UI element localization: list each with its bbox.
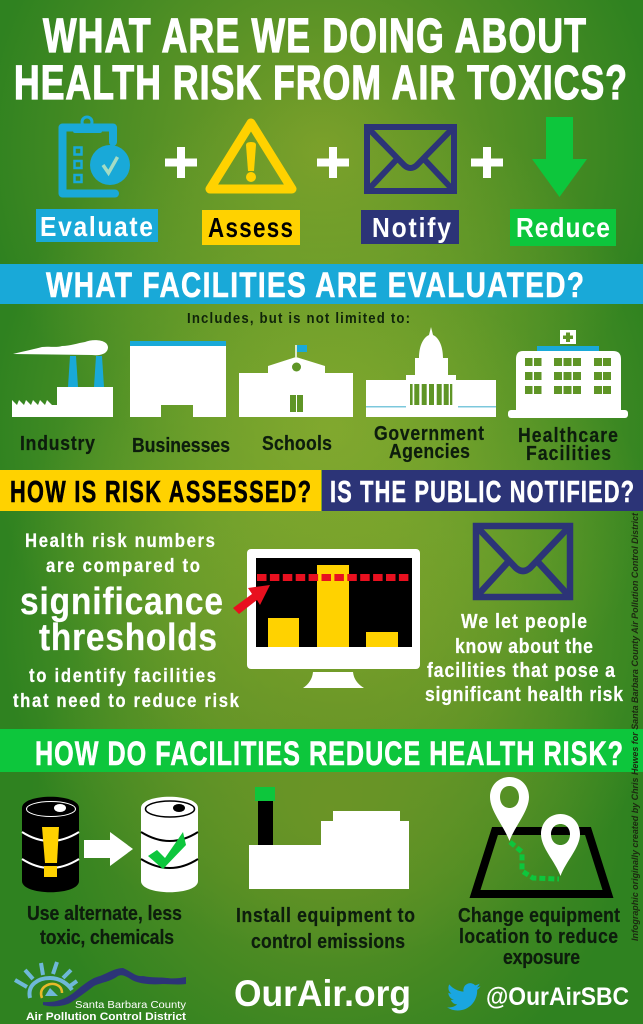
plus <box>165 147 197 178</box>
text: use alternate: toxic, chemicals <box>40 926 174 948</box>
text: we let people know: know about the <box>455 635 593 657</box>
text: install equipment: control emissions <box>251 930 405 952</box>
icon: twitter bird <box>447 983 481 1010</box>
icon: white barrel <box>141 797 198 892</box>
text: change equipment: location to reduce <box>459 925 618 947</box>
icon: businesses <box>130 341 226 417</box>
icon: government <box>366 327 496 417</box>
facility labels: Schools <box>262 432 332 454</box>
text: we let people know: We let people <box>461 610 587 632</box>
facility labels: Agencies <box>389 440 470 462</box>
title: HEALTH RISK FROM AIR TOXICS? <box>14 56 627 109</box>
icon: clipboard evaluate <box>62 117 130 194</box>
text: we let people know: significant health risk <box>425 683 623 705</box>
text: includes: Includes, but is not limited to: <box>187 309 410 326</box>
icon: black barrel <box>22 797 79 892</box>
icon: envelope notify <box>367 127 454 191</box>
icon: warning triangle assess <box>210 123 292 189</box>
heading band: is the public notified: IS THE PUBLIC NOTIFIED? <box>330 474 634 509</box>
logo: air pollution control district: Air Pollution Control District <box>26 1011 186 1023</box>
text: significance thresholds <box>13 530 239 711</box>
logo: air pollution control district: Santa Barbara County <box>75 1000 186 1011</box>
text: change equipment <box>458 904 621 968</box>
heading band: how do facilities reduce health risk: HOW DO FACILITIES REDUCE HEALTH RISK? <box>35 735 623 773</box>
facility labels: Businesses <box>132 434 230 456</box>
icon: monitor with bar chart <box>233 549 420 688</box>
text: significance thresholds: thresholds <box>39 616 217 658</box>
arrow <box>84 832 133 866</box>
text: install equipment <box>236 904 415 952</box>
heading band: what facilities are evaluated: WHAT FACILITIES ARE EVALUATED? <box>46 265 584 305</box>
text: change equipment: exposure <box>503 946 580 968</box>
facility labels <box>20 422 618 464</box>
facility labels: Healthcare <box>518 424 618 446</box>
icon: down arrow reduce <box>532 117 587 197</box>
icon: schools <box>239 345 353 417</box>
title: WHAT ARE WE DOING ABOUT <box>43 9 586 62</box>
text: significance thresholds: significance <box>20 580 223 622</box>
facility labels: Facilities <box>526 442 611 464</box>
icon: map with pins <box>475 777 608 894</box>
facility labels: Industry <box>20 432 95 454</box>
text: significance thresholds: are compared to <box>46 555 200 576</box>
icon: healthcare <box>508 330 628 418</box>
text: change equipment: Change equipment <box>458 904 621 926</box>
text: significance thresholds: to identify facilities <box>29 665 216 686</box>
icon: envelope <box>476 526 570 597</box>
label: assess: Assess <box>208 213 293 244</box>
label: notify: Notify <box>372 212 451 243</box>
website: OurAir.org <box>234 973 411 1014</box>
heading band: how is risk assessed: HOW IS RISK ASSESSED? <box>10 474 311 509</box>
label: reduce: Reduce <box>516 212 610 243</box>
text: significance thresholds: Health risk numbers <box>25 530 215 551</box>
text: we let people know: facilities that pose a <box>427 659 615 681</box>
text: use alternate <box>27 902 182 948</box>
plus <box>317 147 349 178</box>
text: significance thresholds: that need to reduce risk <box>13 690 239 711</box>
twitter handle: @OurAirSBC <box>486 983 629 1011</box>
title <box>14 9 627 109</box>
credit: Infographic originally created by Chris Hewes for Santa Barbara County Air Pollution Control District <box>630 512 641 941</box>
text: we let people know <box>425 610 623 705</box>
logo: air pollution control district <box>15 962 186 1023</box>
icon: factory with control equipment <box>249 787 409 889</box>
label: evaluate: Evaluate <box>40 211 153 242</box>
facility labels: Government <box>374 422 485 444</box>
text: install equipment: Install equipment to <box>236 904 415 926</box>
text: use alternate: Use alternate, less <box>27 902 182 924</box>
icon: industry <box>12 340 113 417</box>
plus <box>471 147 503 178</box>
